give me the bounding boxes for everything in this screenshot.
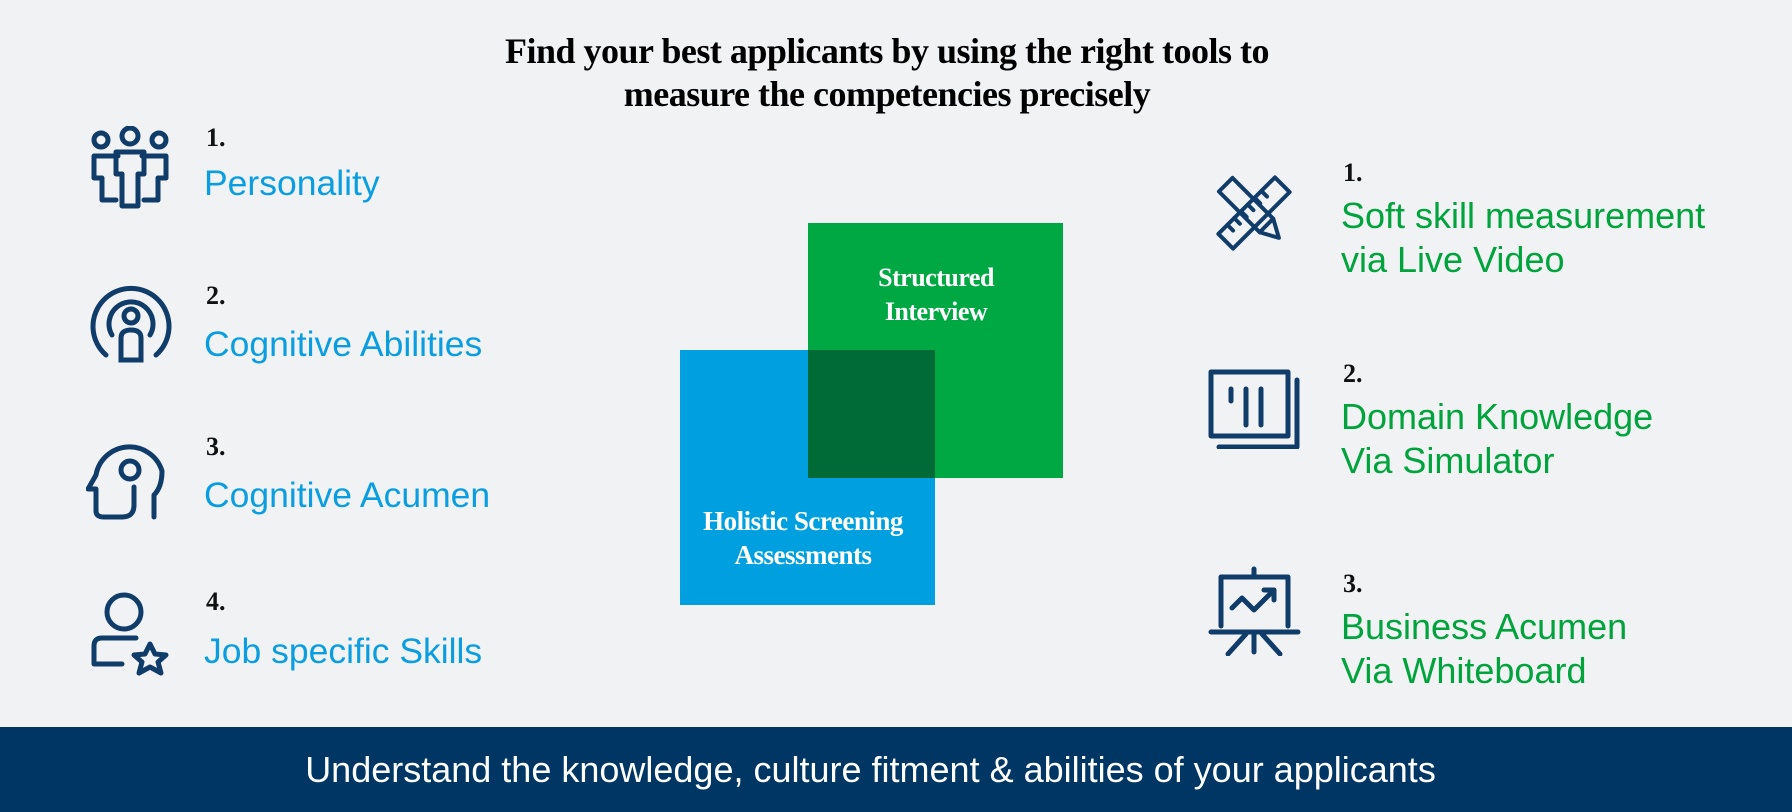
icon: whiteboard bbox=[1208, 566, 1300, 656]
label: Holistic Screening Assessments: Assessments bbox=[734, 540, 872, 570]
item: Domain Knowledge bbox=[1341, 359, 1653, 481]
text: Cognitive Abilities bbox=[204, 324, 482, 364]
text: Via Simulator bbox=[1341, 440, 1554, 481]
footer banner: Understand the knowledge, culture fitment & abilities of your applicants bbox=[305, 749, 1436, 790]
item: Cognitive Acumen bbox=[204, 432, 490, 515]
footer banner bbox=[0, 727, 1792, 812]
item: Job specific Skills bbox=[204, 587, 482, 671]
icon: cognitive abilities bbox=[90, 286, 172, 362]
label: Holistic Screening Assessments: Holistic Screening bbox=[703, 506, 903, 536]
overlap bbox=[808, 350, 935, 478]
title: measure the competencies precisely bbox=[624, 74, 1150, 114]
icon: simulator panel bbox=[1208, 370, 1300, 449]
text: Soft skill measurement bbox=[1341, 195, 1705, 236]
venn squares bbox=[680, 223, 1063, 605]
text: 4. bbox=[206, 587, 226, 616]
icon: person star bbox=[92, 592, 168, 676]
text: via Live Video bbox=[1341, 239, 1564, 280]
text: 3. bbox=[1343, 569, 1362, 598]
item: Cognitive Abilities bbox=[204, 281, 482, 364]
icon: ruler pencil bbox=[1216, 175, 1292, 251]
text: Personality bbox=[204, 163, 380, 203]
text: 2. bbox=[206, 281, 226, 310]
title: Find your best applicants by using the right tools to bbox=[505, 31, 1269, 71]
label: Holistic Screening Assessments bbox=[703, 506, 904, 570]
icon: people bbox=[92, 126, 168, 208]
text: 3. bbox=[206, 432, 226, 461]
label: Structured Interview bbox=[878, 263, 994, 326]
text: 2. bbox=[1343, 359, 1362, 388]
icon: head bbox=[86, 444, 164, 520]
text: Job specific Skills bbox=[204, 631, 482, 671]
square: structured interview bbox=[808, 223, 1063, 478]
item: Soft skill measurement bbox=[1341, 158, 1705, 280]
title bbox=[505, 31, 1269, 114]
item: Business Acumen bbox=[1341, 569, 1627, 691]
text: Business Acumen bbox=[1341, 606, 1627, 647]
label: Structured Interview: Structured bbox=[878, 263, 994, 292]
text: 1. bbox=[1343, 158, 1362, 187]
text: Cognitive Acumen bbox=[204, 475, 490, 515]
text: 1. bbox=[206, 123, 226, 152]
square: holistic screening bbox=[680, 350, 935, 605]
text: Domain Knowledge bbox=[1341, 396, 1653, 437]
item: Personality bbox=[204, 123, 380, 203]
text: Via Whiteboard bbox=[1341, 650, 1586, 691]
label: Structured Interview: Interview bbox=[885, 297, 987, 326]
